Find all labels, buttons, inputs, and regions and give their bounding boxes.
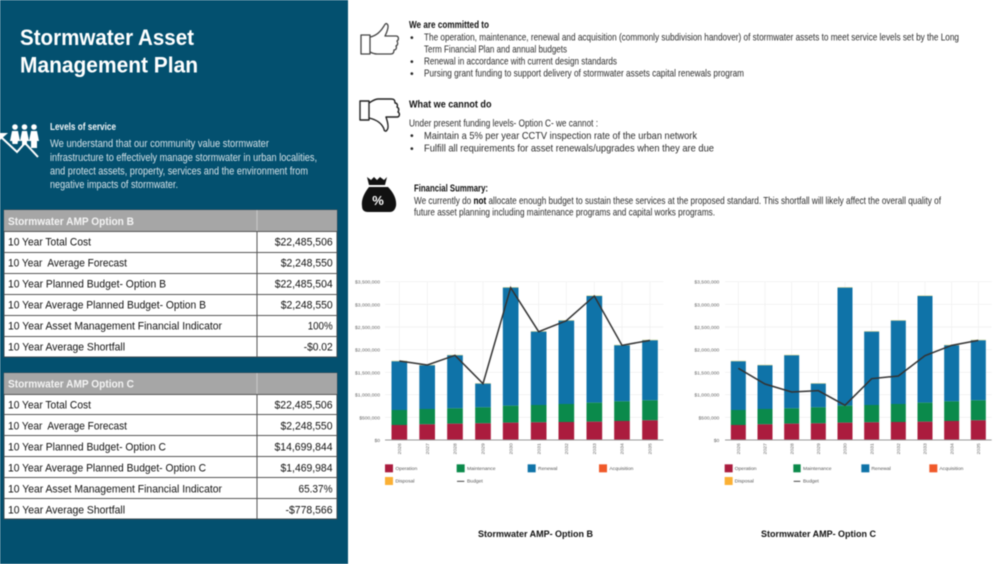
chart: Option C stacked bars with budget line: 2032	[896, 443, 902, 454]
table: Stormwater AMP Option C: 10 Year Average Planned Budget- Option C	[8, 462, 206, 474]
table: Stormwater AMP Option B: 10 Year Planned Budget- Option B	[8, 279, 166, 291]
icon: money bag with percent: %	[372, 193, 384, 208]
text block: levels of service description: and protect assets, property, services and the environment from	[50, 166, 308, 178]
chart: Option B stacked bars with budget line: $1,000,000	[355, 393, 380, 399]
table: Stormwater AMP Option C: 10 Year Asset Management Financial Indicator	[8, 483, 222, 495]
table: Stormwater AMP Option C: Stormwater AMP Option C	[8, 378, 134, 390]
text block: we are committed to: •	[410, 68, 414, 80]
chart: Option C stacked bars with budget line: 2027	[763, 443, 769, 454]
chart: Option C stacked bars with budget line: 2033	[923, 443, 929, 454]
table: Stormwater AMP Option B: 10 Year Asset Management Financial Indicator	[8, 321, 222, 333]
chart: Option B stacked bars with budget line: $0	[374, 438, 380, 444]
chart: Option B stacked bars with budget line: Maintenance	[467, 466, 496, 472]
table: Stormwater AMP Option C	[4, 373, 337, 519]
table: Stormwater AMP Option B: Stormwater AMP Option B	[8, 216, 134, 228]
text block: what we cannot do: What we cannot do	[409, 100, 492, 111]
chart: Option C stacked bars with budget line: $500,000	[699, 415, 720, 421]
chart: Option B stacked bars with budget line: $500,000	[359, 415, 380, 421]
chart: Option C stacked bars with budget line: $3,500,000	[694, 280, 720, 286]
text block: what we cannot do: Maintain a 5% per year CCTV inspection rate of the urban network	[424, 130, 698, 142]
chart: Option B stacked bars with budget line: 2033	[592, 443, 598, 454]
text block: we are committed to: Renewal in accordance with current design standards	[424, 56, 617, 68]
table: Stormwater AMP Option B	[4, 210, 337, 357]
chart: Option B stacked bars with budget line: Renewal	[538, 466, 557, 472]
text block: we are committed to	[409, 20, 959, 80]
chart: Option B stacked bars with budget line: 2031	[536, 443, 542, 454]
chart: Option B stacked bars with budget line: 2035	[648, 443, 654, 454]
chart: Option C stacked bars with budget line	[694, 280, 992, 485]
table: Stormwater AMP Option C: 10 Year Total Cost	[8, 399, 91, 411]
table: Stormwater AMP Option C: $2,248,550	[280, 420, 332, 432]
chart: Option B stacked bars with budget line: 2030	[508, 443, 514, 454]
text block: what we cannot do	[409, 100, 714, 155]
chart: Option C stacked bars with budget line: 2035	[976, 443, 982, 454]
table: Stormwater AMP Option B: 100%	[308, 321, 333, 333]
icon: thumbs down	[360, 99, 399, 131]
text block: what we cannot do: Under present funding levels- Option C- we cannot :	[409, 117, 598, 129]
chart: Option B stacked bars with budget line: $2,000,000	[355, 348, 380, 354]
table: Stormwater AMP Option B: $22,485,504	[275, 279, 333, 291]
chart: Option C stacked bars with budget line: Budget	[803, 479, 819, 485]
table: Stormwater AMP Option C: 10 Year Planned Budget- Option C	[8, 441, 166, 453]
chart: Option C stacked bars with budget line: Acquisition	[939, 466, 964, 472]
chart: Option B stacked bars with budget line: 2034	[620, 443, 626, 454]
chart: Option C stacked bars with budget line: Disposal	[735, 479, 754, 485]
text block: levels of service description: infrastructure to effectively manage stormwater in urban localities,	[50, 152, 317, 164]
table: Stormwater AMP Option B: -$0.02	[304, 342, 333, 354]
table: Stormwater AMP Option B: 10 Year Total Cost	[8, 237, 91, 249]
chart: Option B stacked bars with budget line: $3,500,000	[355, 280, 380, 286]
caption: option C chart: Stormwater AMP- Option C	[761, 529, 876, 540]
text block: financial summary	[414, 184, 941, 219]
chart: Option B stacked bars with budget line: $2,500,000	[355, 325, 380, 331]
text block: financial summary: future asset planning including maintenance programs and capital works programs.	[414, 207, 715, 219]
text block: we are committed to: Term Financial Plan and annual budgets	[424, 44, 567, 56]
chart: Option B stacked bars with budget line: $1,500,000	[355, 370, 380, 376]
chart: Option C stacked bars with budget line: Operation	[735, 466, 757, 472]
table: Stormwater AMP Option B: 10 Year Average Planned Budget- Option B	[8, 300, 206, 312]
chart: Option C stacked bars with budget line: $3,000,000	[694, 302, 720, 308]
chart: Option C stacked bars with budget line: 2028	[789, 443, 795, 454]
chart: Option B stacked bars with budget line: 2026	[397, 443, 403, 454]
chart: Option B stacked bars with budget line: Operation	[395, 466, 417, 472]
chart: Option C stacked bars with budget line: $1,000,000	[694, 393, 720, 399]
text block: what we cannot do: •	[410, 143, 414, 155]
table: Stormwater AMP Option C: $14,699,844	[274, 441, 332, 453]
text block: we are committed to: •	[410, 32, 414, 44]
chart: Option B stacked bars with budget line: Acquisition	[609, 466, 634, 472]
icon: thumbs up	[361, 24, 398, 54]
table: Stormwater AMP Option C: $1,469,984	[280, 462, 332, 474]
title: Management Plan	[20, 52, 198, 78]
table: Stormwater AMP Option C: 10 Year Average Shortfall	[8, 504, 125, 516]
text block: financial summary: Financial Summary:	[414, 184, 488, 194]
table: Stormwater AMP Option B: $2,248,550	[281, 300, 333, 312]
table: Stormwater AMP Option C: 65.37%	[298, 483, 333, 495]
table: Stormwater AMP Option B: $2,248,550	[281, 258, 333, 270]
chart: Option C stacked bars with budget line: $1,500,000	[694, 370, 720, 376]
text block: we are committed to: Pursing grant funding to support delivery of stormwater assets capital renewals program	[424, 68, 744, 80]
table: Stormwater AMP Option C: $22,485,506	[274, 399, 332, 411]
chart: Option B stacked bars with budget line: Disposal	[395, 479, 414, 485]
chart: Option C stacked bars with budget line: 2029	[816, 443, 822, 454]
chart: Option C stacked bars with budget line: $2,000,000	[694, 348, 720, 354]
panel: left sidebar	[0, 0, 348, 564]
table: Stormwater AMP Option B: 10 Year Average Shortfall	[8, 342, 125, 354]
heading: levels of service: Levels of service	[50, 121, 116, 133]
chart: Option B stacked bars with budget line: 2028	[453, 443, 459, 454]
chart: Option B stacked bars with budget line: 2027	[425, 443, 431, 454]
text block: what we cannot do: •	[410, 130, 414, 142]
text block: levels of service description	[50, 138, 317, 191]
icon: money bag with percent	[362, 177, 396, 212]
table: Stormwater AMP Option C: -$778,566	[286, 504, 332, 516]
chart: Option C stacked bars with budget line: $0	[714, 438, 720, 444]
chart: Option B stacked bars with budget line	[355, 280, 663, 485]
table: Stormwater AMP Option C: 10 Year Average Forecast	[8, 420, 127, 432]
icon: people with rising arrow	[0, 124, 39, 157]
text block: levels of service description: We understand that our community value stormwater	[50, 138, 269, 150]
chart: Option B stacked bars with budget line: Budget	[467, 479, 483, 485]
chart: Option C stacked bars with budget line: Renewal	[871, 466, 891, 472]
chart: Option B stacked bars with budget line: 2029	[481, 443, 487, 454]
chart: Option B stacked bars with budget line: $3,000,000	[355, 302, 380, 308]
chart: Option C stacked bars with budget line: $2,500,000	[694, 325, 720, 331]
text block: what we cannot do: Fulfill all requirements for asset renewals/upgrades when they are due	[424, 143, 714, 155]
chart: Option C stacked bars with budget line: 2031	[869, 443, 875, 454]
chart: Option C stacked bars with budget line: 2034	[949, 443, 955, 454]
title	[20, 25, 198, 78]
text block: levels of service description: negative impacts of stormwater.	[50, 179, 178, 191]
text block: we are committed to: •	[410, 56, 414, 68]
text block: we are committed to: We are committed to	[409, 20, 489, 31]
chart: Option C stacked bars with budget line: 2026	[736, 443, 742, 454]
caption: option B chart: Stormwater AMP- Option B	[478, 529, 593, 540]
chart: Option C stacked bars with budget line: 2030	[843, 443, 849, 454]
table: Stormwater AMP Option B: $22,485,506	[275, 237, 333, 249]
chart: Option B stacked bars with budget line: 2032	[564, 443, 570, 454]
chart: Option C stacked bars with budget line: Maintenance	[803, 466, 832, 472]
title: Stormwater Asset	[20, 25, 195, 50]
table: Stormwater AMP Option B: 10 Year Average Forecast	[8, 258, 127, 270]
